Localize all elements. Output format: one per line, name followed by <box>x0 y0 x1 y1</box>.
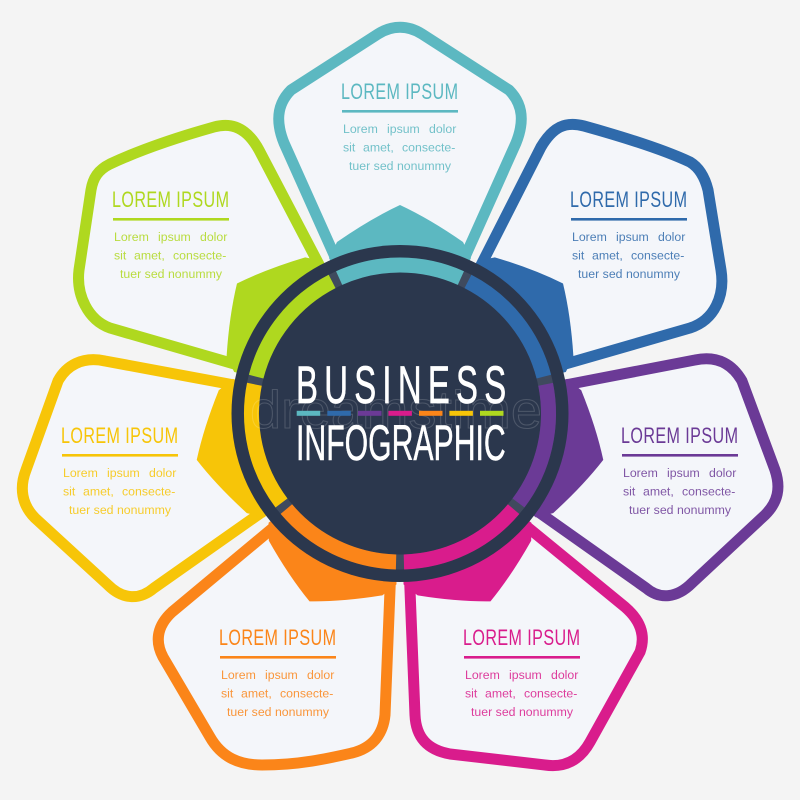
panel: purple petal <box>397 347 778 596</box>
text: magenta block: tuer sed nonummy <box>471 705 574 719</box>
panel: teal petal <box>279 27 521 400</box>
text: orange block <box>219 625 336 719</box>
text: magenta block: amet, <box>485 686 516 700</box>
panel: green petal <box>79 125 434 461</box>
text: purple block: LOREM IPSUM <box>621 423 738 449</box>
text: yellow block: dolor <box>149 466 176 480</box>
text: green block: sit <box>114 248 127 262</box>
text: orange block: Lorem <box>221 668 256 682</box>
text: orange block: ipsum <box>265 668 298 682</box>
title: infographic: INFOGRAPHIC <box>296 416 506 472</box>
text: blue block: LOREM IPSUM <box>570 187 687 213</box>
text: green block: dolor <box>200 230 227 244</box>
text: green block <box>112 187 229 281</box>
text: magenta block <box>463 625 580 719</box>
text: purple block: consecte- <box>682 484 735 498</box>
text: yellow block: tuer sed nonummy <box>69 503 172 517</box>
text: green block: amet, <box>134 248 165 262</box>
text: green block: ipsum <box>158 230 191 244</box>
watermark: dreamstime <box>250 381 542 440</box>
text: magenta block: sit <box>465 686 478 700</box>
text: magenta block: Lorem <box>465 668 500 682</box>
text: orange block: sit <box>221 686 234 700</box>
text: magenta block: LOREM IPSUM <box>463 625 580 651</box>
text: yellow block: Lorem <box>63 466 98 480</box>
text: teal block: consecte- <box>402 140 455 154</box>
text: purple block <box>621 423 738 517</box>
text: yellow block: LOREM IPSUM <box>61 423 178 449</box>
text: purple block: ipsum <box>667 466 700 480</box>
text: blue block: dolor <box>658 230 685 244</box>
text: green block: LOREM IPSUM <box>112 187 229 213</box>
text: teal block: tuer sed nonummy <box>349 159 452 173</box>
text: blue block: sit <box>572 248 585 262</box>
text: green block: tuer sed nonummy <box>120 267 223 281</box>
text: teal block: dolor <box>429 122 456 136</box>
text: green block: consecte- <box>173 248 226 262</box>
text: blue block <box>570 187 687 281</box>
text: yellow block <box>61 423 178 517</box>
text: teal block: sit <box>343 140 356 154</box>
text: teal block: ipsum <box>387 122 420 136</box>
text: magenta block: dolor <box>551 668 578 682</box>
panel: yellow petal <box>22 347 403 597</box>
text: purple block: amet, <box>643 484 674 498</box>
center hub <box>191 204 609 623</box>
text: purple block: tuer sed nonummy <box>629 503 732 517</box>
text: yellow block: ipsum <box>107 466 140 480</box>
text: teal block: amet, <box>363 140 394 154</box>
text: purple block: dolor <box>709 466 736 480</box>
text: purple block: Lorem <box>623 466 658 480</box>
text: yellow block: consecte- <box>122 484 175 498</box>
text: blue block: ipsum <box>616 230 649 244</box>
text: yellow block: sit <box>63 484 76 498</box>
text: orange block: consecte- <box>280 686 333 700</box>
panel: orange petal <box>158 395 458 765</box>
text: green block: Lorem <box>114 230 149 244</box>
panel: magenta petal <box>342 395 642 766</box>
text: teal block: LOREM IPSUM <box>341 79 458 105</box>
text: orange block: amet, <box>241 686 272 700</box>
text: orange block: tuer sed nonummy <box>227 705 330 719</box>
text: orange block: dolor <box>307 668 334 682</box>
text: blue block: consecte- <box>631 248 684 262</box>
text: blue block: Lorem <box>572 230 607 244</box>
panel: blue petal <box>366 124 722 461</box>
text: purple block: sit <box>623 484 636 498</box>
text: orange block: LOREM IPSUM <box>219 625 336 651</box>
title: business: BUSINESS <box>296 356 506 415</box>
text: yellow block: amet, <box>83 484 114 498</box>
text: teal block <box>341 79 458 173</box>
segmented color ring <box>191 204 609 623</box>
text: blue block: tuer sed nonummy <box>578 267 681 281</box>
text: magenta block: ipsum <box>509 668 542 682</box>
text: magenta block: consecte- <box>524 686 577 700</box>
text: teal block: Lorem <box>343 122 378 136</box>
text: blue block: amet, <box>592 248 623 262</box>
colored dash row <box>297 411 504 416</box>
